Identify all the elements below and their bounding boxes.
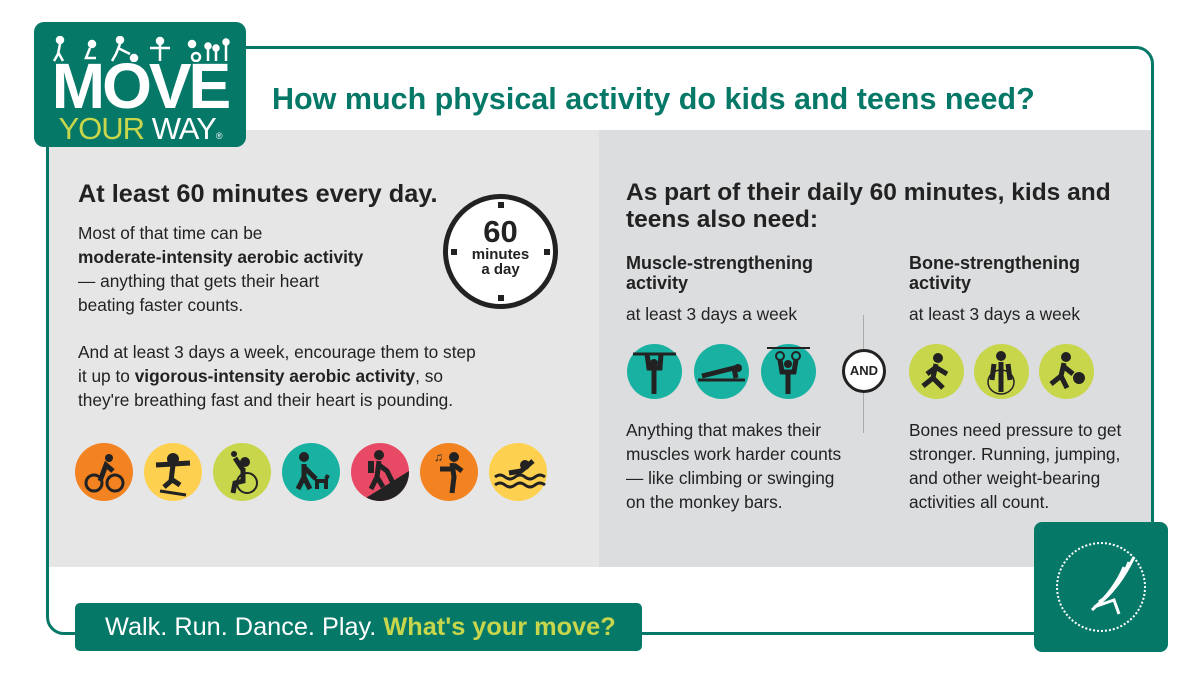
heading: 60 minutes: At least 60 minutes every day. [78, 180, 437, 208]
text: vigorous: And at least 3 days a week, encourage them to step [78, 342, 476, 362]
badge: AND [842, 349, 886, 393]
column: bone: and other weight-bearing [909, 468, 1100, 488]
column: bone: Bones need pressure to get [909, 420, 1121, 440]
text: vigorous: they're breathing fast and their heart is pounding. [78, 390, 453, 410]
text: moderate: — anything that gets their heart [78, 271, 319, 291]
icon: eagle [1091, 556, 1136, 614]
icons: muscle [627, 344, 816, 399]
icon: figures on logo [53, 36, 230, 62]
title: How much physical activity do kids and teens need? [272, 82, 1035, 116]
text: vigorous [78, 342, 476, 410]
icon: clock [443, 194, 558, 309]
column: muscle [626, 253, 841, 512]
footer tagline: Walk. Run. Dance. Play. What's your move? [105, 613, 616, 641]
column: muscle: on the monkey bars. [626, 492, 783, 512]
text: moderate: moderate-intensity aerobic activity [78, 247, 363, 267]
column: bone: at least 3 days a week [909, 304, 1080, 324]
text: vigorous: it up to vigorous-intensity aerobic activity, so [78, 366, 443, 386]
panel: right grey [599, 130, 1151, 567]
heading: also need: teens also need: [626, 206, 818, 233]
column: bone: stronger. Running, jumping, [909, 444, 1120, 464]
text: moderate [78, 223, 364, 315]
icons: bone [909, 344, 1094, 399]
icons: aerobic activities [75, 443, 547, 501]
icons: aerobic activities: ♫ [434, 450, 443, 464]
logo: Move Your Way: MOVE [52, 50, 228, 122]
icon: clock: a day [481, 261, 520, 278]
heading: also need: As part of their daily 60 minutes, kids and [626, 179, 1111, 206]
heading: also need [626, 179, 1111, 233]
logo: HHS [1034, 522, 1168, 652]
column: bone [909, 253, 1122, 512]
logo: Move Your Way [34, 22, 246, 147]
text: moderate: Most of that time can be [78, 223, 262, 243]
column: muscle: Anything that makes their [626, 420, 821, 440]
panel: left grey [49, 130, 599, 567]
badge: AND: AND [850, 363, 878, 378]
column: muscle: at least 3 days a week [626, 304, 797, 324]
column: bone: activities all count. [909, 492, 1049, 512]
column: bone: Bone-strengthening [909, 253, 1080, 273]
logo: Move Your Way: YOUR WAY® [58, 111, 222, 146]
column: muscle: Muscle-strengthening [626, 253, 813, 273]
column: muscle: activity [626, 273, 688, 293]
column: muscle: — like climbing or swinging [626, 468, 834, 488]
icon: clock: 60 [483, 214, 518, 249]
footer tagline [75, 603, 642, 651]
column: bone: activity [909, 273, 971, 293]
icon: clock: minutes [472, 246, 529, 263]
text: moderate: beating faster counts. [78, 295, 243, 315]
column: muscle: muscles work harder counts [626, 444, 841, 464]
